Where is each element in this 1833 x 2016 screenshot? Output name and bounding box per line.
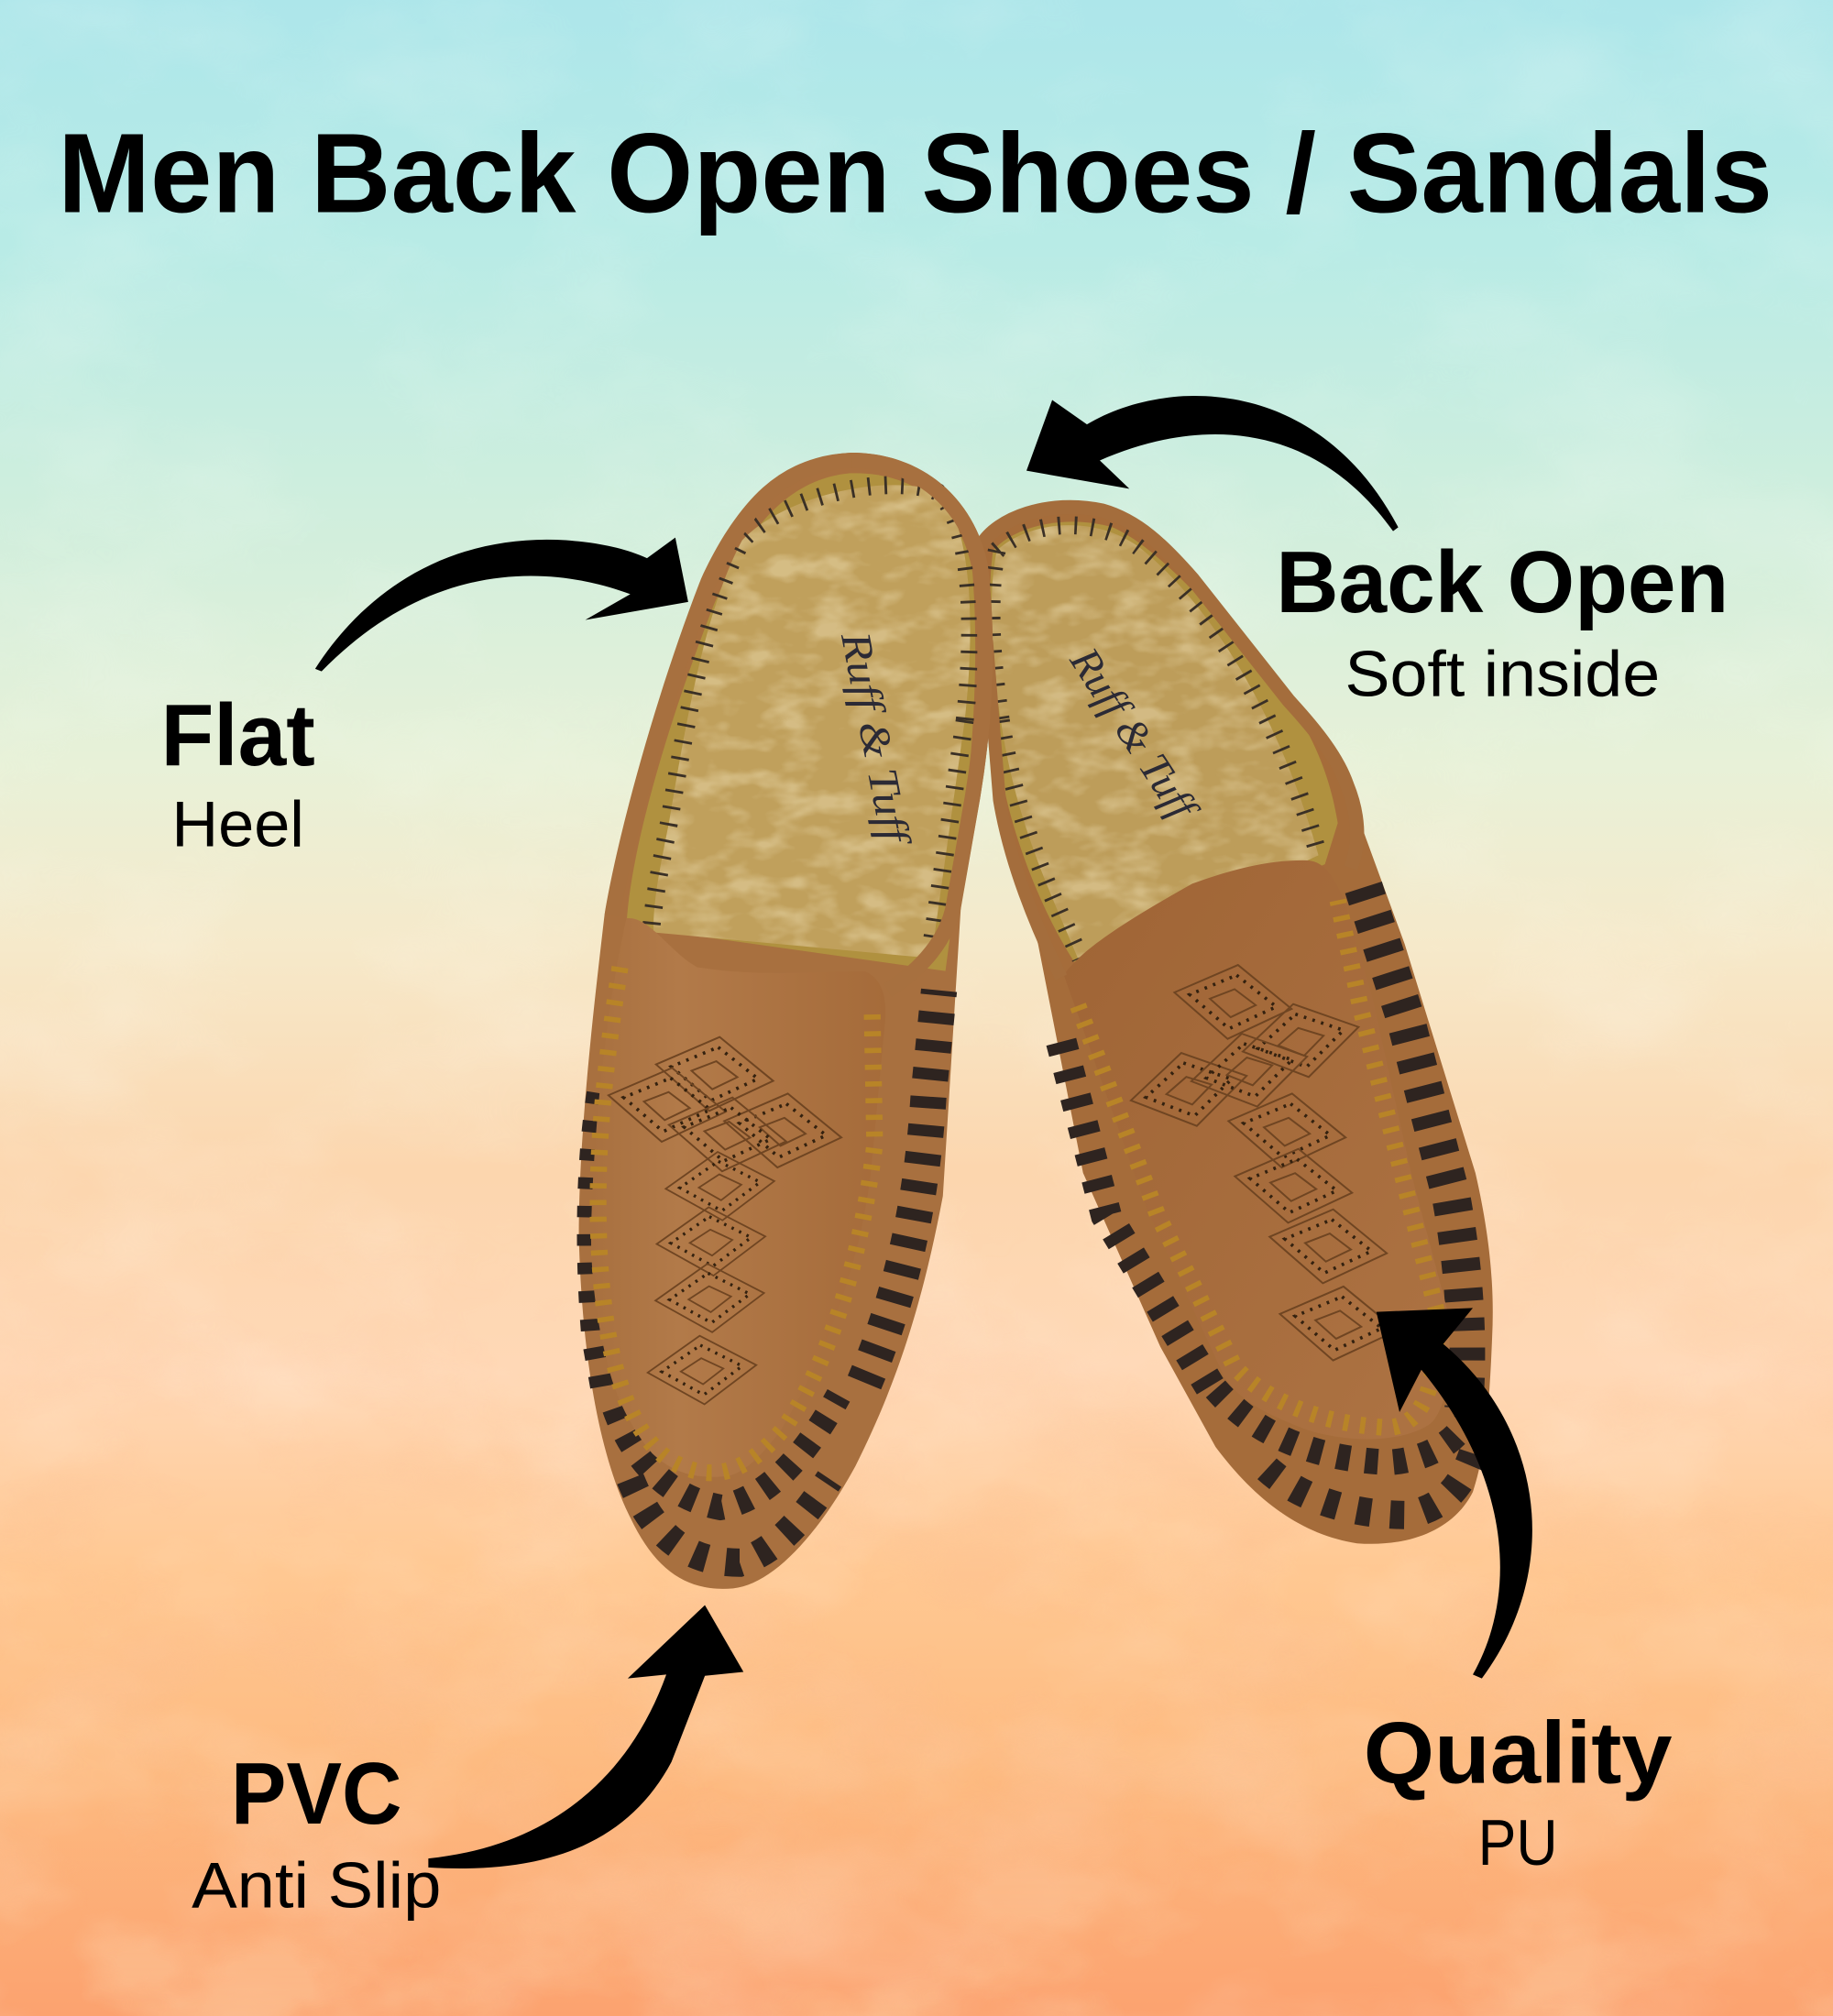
arrow: back open xyxy=(1026,396,1399,531)
label: pvc anti slip xyxy=(192,1746,441,1921)
right pattern xyxy=(1124,957,1402,1369)
label: flat heel: Flat xyxy=(160,687,315,784)
label: back open soft inside xyxy=(1276,534,1729,709)
left shoe perforations xyxy=(590,991,939,1562)
left insole xyxy=(653,485,970,957)
right rim xyxy=(982,507,1357,868)
left shoe xyxy=(579,453,993,1589)
left shoe lining xyxy=(627,473,975,971)
label: back open soft inside: Soft inside xyxy=(1345,637,1660,709)
arrow: flat xyxy=(315,538,688,672)
right insole xyxy=(992,525,1318,959)
label: quality pu xyxy=(1364,1704,1673,1879)
label: flat heel xyxy=(160,687,315,860)
label: quality pu: Quality xyxy=(1364,1704,1673,1802)
arrow: pvc xyxy=(428,1605,743,1868)
label: pvc anti slip: PVC xyxy=(231,1746,402,1843)
left brand text: Ruff & Tuff xyxy=(831,628,919,851)
right shoe body xyxy=(982,507,1493,1544)
left insole stitches xyxy=(651,485,971,946)
right shoe perforations xyxy=(1061,887,1473,1515)
left shoe body xyxy=(579,453,993,1589)
right vamp xyxy=(1064,860,1450,1439)
right brand text: Ruff & Tuff xyxy=(1060,639,1208,832)
label: quality pu: PU xyxy=(1478,1806,1558,1879)
right shoe xyxy=(978,501,1493,1544)
left rim xyxy=(851,460,985,991)
right shoe lining xyxy=(990,521,1338,971)
left vamp xyxy=(591,918,885,1477)
title: Men Back Open Shoes / Sandals xyxy=(58,111,1773,237)
label: pvc anti slip: Anti Slip xyxy=(192,1848,441,1921)
left stitching xyxy=(598,967,874,1473)
label: back open soft inside: Back Open xyxy=(1276,534,1729,631)
label: flat heel: Heel xyxy=(171,788,304,860)
right insole stitches xyxy=(992,525,1319,959)
left pattern xyxy=(603,1029,847,1408)
right stitching xyxy=(1078,900,1437,1428)
arrow: quality xyxy=(1377,1308,1532,1679)
